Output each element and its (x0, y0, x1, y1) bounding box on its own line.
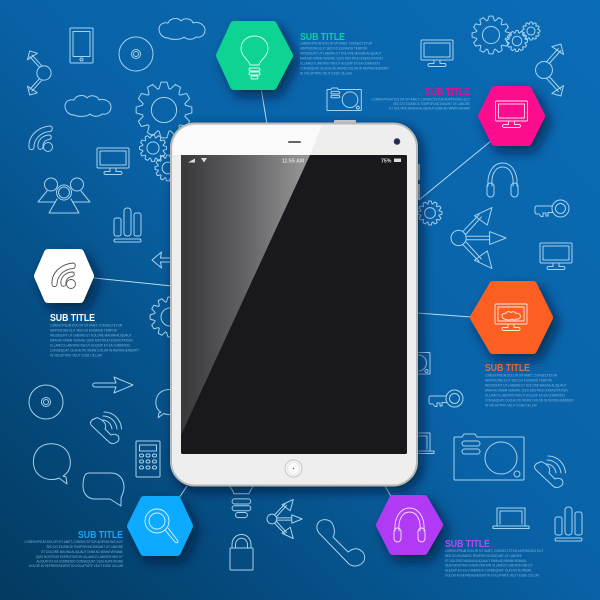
status wifi (201, 158, 207, 162)
hexagon icon: headphones (394, 508, 425, 542)
text block: pink (372, 87, 471, 111)
text block: purple: ET DOLORE MAGNA ALIQUAUT ENIM AD MINIM VENIAM, (445, 559, 527, 563)
icon: cloud (65, 96, 111, 116)
icon: key (535, 200, 569, 217)
icon: wifi (29, 126, 52, 152)
icon: monitor (540, 243, 572, 270)
icon: gear small (522, 22, 540, 40)
icon: cd (29, 385, 63, 419)
line icons: right (395, 351, 582, 541)
icon: lock (230, 534, 253, 570)
text block: green: ENIM AD MINIM VENIAM, QUIS NOSTRUD EXERCITATION (300, 56, 383, 61)
text block: white (50, 313, 140, 358)
tablet (171, 120, 420, 486)
text block: pink: ET DOLORE MAGNA ALIQUAUT ENIM AD MINIM VENIAM (389, 106, 470, 111)
text block: purple: DOLOR IN REPREHENDERIT IN VOLUPTATE VELIT ESSE CILLUM (445, 573, 539, 578)
icon: camera partial (395, 351, 430, 374)
hexagon: white (38, 253, 90, 299)
hexagon: pink (482, 90, 541, 142)
icon: speech bubble 2 (83, 473, 124, 506)
icon: phone (317, 520, 365, 566)
text block: orange: ADIPISICING ELIT SED DO EIUSMOD TEMPOR (485, 378, 552, 383)
hexagon: blue (131, 500, 189, 552)
icon: gear near tablet (418, 201, 442, 225)
icon: people (38, 178, 90, 213)
icon: cloud top (159, 19, 205, 39)
hexagon: green (220, 25, 289, 86)
text block: blue: SUB TITLE (78, 530, 123, 541)
text block: white: IN VOLUPTATE VELIT ESSE CILLUM (50, 353, 102, 358)
hexagon: orange (474, 285, 549, 350)
connector lines (94, 88, 491, 500)
text block: blue: SED DO EIUSMOD TEMPOR INCIDIDUNT UT LABORE (46, 545, 124, 549)
icon: headphones (487, 163, 518, 197)
text block: pink: LOREM IPSUM DOLOR SIT AMET, CONSECTETUR ADIPISICING ELIT (372, 97, 471, 102)
icon: camera (454, 434, 524, 480)
text block: purple: SUB TITLE (445, 539, 490, 550)
text block: orange: IN VOLUPTATE VELIT ESSE CILLUM (485, 403, 537, 408)
icon: laptop (493, 508, 529, 528)
text block: blue: DOLOR IN REPREHENDERIT IN VOLUPTATE VELIT ESSE CILLUM (29, 564, 123, 568)
screen (181, 155, 407, 454)
text block: white: SUB TITLE (50, 313, 95, 324)
icon: small gear 2 (155, 155, 181, 181)
status battery: 75% (381, 158, 392, 164)
line icons: left and bottom (29, 252, 365, 570)
icon: laptop partial (398, 433, 434, 454)
icon: monitor (421, 40, 453, 66)
icon: speech bubble (33, 444, 70, 484)
hexagon icon: monitor with cloud (495, 304, 527, 330)
text block: blue: QUIS NOSTRUD EXERCITATION ULLAMCO LABORIS NISI UT (36, 555, 124, 559)
icon: gears big (472, 16, 510, 54)
hexagon icon: wifi (52, 263, 76, 288)
tablet body (171, 124, 417, 486)
text block: orange: ULLAMCO LABORIS NISI UT ALIQUIP EX EA COMMODO (485, 393, 565, 398)
text block: pink: SUB TITLE (425, 87, 470, 98)
text block: green: IN VOLUPTATE VELIT ESSE CILLUM (300, 71, 352, 76)
status signal (188, 158, 195, 162)
icon: tablet (70, 28, 93, 63)
text block: white: ENIM AD MINIM VENIAM, QUIS NOSTRUD EXERCITATION (50, 338, 133, 343)
icon: three arrows (451, 208, 506, 268)
side buttons (334, 120, 420, 200)
text block: green: ADIPISICING ELIT SED DO EIUSMOD TEMPOR (300, 46, 367, 51)
text block: green: SUB TITLE (300, 32, 345, 43)
icon: three arrows (267, 500, 302, 538)
camera (394, 138, 400, 144)
icon: camera small (327, 88, 361, 111)
text block: white: LOREM IPSUM DOLOR SIT AMET, CONSECTETUR (50, 323, 122, 328)
text block: orange: SUB TITLE (485, 363, 530, 374)
icon: bars (555, 507, 582, 541)
text block: orange (485, 363, 575, 408)
battery icon (394, 158, 401, 162)
text block: white: CONSEQUAT. DUIS AUTE IRURE DOLOR IN REPREHENDERIT (50, 348, 140, 353)
icon: bulb bottom (218, 444, 264, 518)
bezel highlight (173, 125, 322, 155)
text block: purple: ALIQUIP EX EA COMMODO CONSEQUAT. DUIS AUTE IRURE (445, 568, 532, 573)
icon: bar chart (114, 208, 141, 242)
text block: green: LOREM IPSUM DOLOR SIT AMET, CONSECTETUR (300, 41, 372, 46)
text block: white: ULLAMCO LABORIS NISI UT ALIQUIP EX EA COMMODO (50, 343, 130, 348)
line icons: top right (327, 16, 572, 269)
icon: monitor (97, 148, 129, 174)
speaker (288, 141, 301, 143)
icon: gear left (150, 297, 190, 337)
icon: small gear (140, 135, 166, 161)
text block: blue: ET DOLORE MAGNA ALIQUAUT ENIM AD MINIM VENIAM, (41, 550, 123, 554)
hexagon icon: magnifier (145, 509, 178, 543)
status time: 11:55 AM (282, 158, 304, 164)
text block: green: ULLAMCO LABORIS NISI UT ALIQUIP EX EA COMMODO (300, 61, 380, 66)
text block: green (300, 32, 390, 76)
text block: purple: SED DO EIUSMOD TEMPOR INCIDIDUNT UT LABORE (445, 554, 522, 558)
icon: branch arrows (536, 44, 564, 96)
line icons: top left (28, 19, 205, 242)
screen glare (181, 155, 310, 435)
hexagon icon: bulb (241, 36, 268, 79)
text block: purple: QUIS NOSTRUD EXERCITATION ULLAMCO LABORIS NISI UT (445, 563, 533, 568)
text block: purple: LOREM IPSUM DOLOR SIT AMET, CONSECTETUR ADIPISICING ELIT (445, 549, 544, 553)
text block: purple (445, 539, 544, 578)
text block: orange: LOREM IPSUM DOLOR SIT AMET, CONSECTETUR (485, 373, 557, 378)
icon: speech partial (156, 390, 182, 418)
icon: cd (119, 37, 153, 71)
icon: calculator (136, 441, 160, 477)
icon: branch arrows (28, 51, 51, 95)
icon: key (429, 390, 463, 407)
icon: big gear (136, 82, 192, 138)
icon: phone wifi (534, 456, 566, 488)
text block: blue: ALIQUIP EX EA COMMODO CONSEQUAT. DUIS AUTE IRURE (37, 559, 124, 564)
text block: orange: INCIDIDUNT UT LABORE ET DOLORE MAGNA ALIQUAUT (485, 383, 567, 388)
text block: green: INCIDIDUNT UT LABORE ET DOLORE MAGNA ALIQUAUT (300, 51, 382, 56)
text block: white: INCIDIDUNT UT LABORE ET DOLORE MAGNA ALIQUAUT (50, 333, 132, 338)
text block: blue: LOREM IPSUM DOLOR SIT AMET, CONSECTETUR ADIPISICING ELIT (25, 540, 124, 544)
text block: orange: ENIM AD MINIM VENIAM, QUIS NOSTRUD EXERCITATION (485, 388, 568, 393)
text block: pink: SED DO EIUSMOD TEMPOR INCIDIDUNT UT LABORE (393, 102, 471, 106)
icon: arrow right (93, 377, 133, 393)
text block: white: ADIPISICING ELIT SED DO EIUSMOD TEMPOR (50, 328, 117, 333)
icon: phone wifi (90, 412, 122, 444)
hexagon: purple (380, 499, 439, 551)
text block: orange: CONSEQUAT. DUIS AUTE IRURE DOLOR IN REPREHENDERIT (485, 398, 575, 403)
home button (285, 460, 302, 477)
icon: gear medium (507, 31, 527, 51)
icon: arrow left (152, 252, 172, 268)
text block: green: CONSEQUAT. DUIS AUTE IRURE DOLOR IN REPREHENDERIT (300, 66, 390, 71)
hexagon icon: monitor (496, 101, 528, 128)
text block: blue (25, 530, 124, 568)
